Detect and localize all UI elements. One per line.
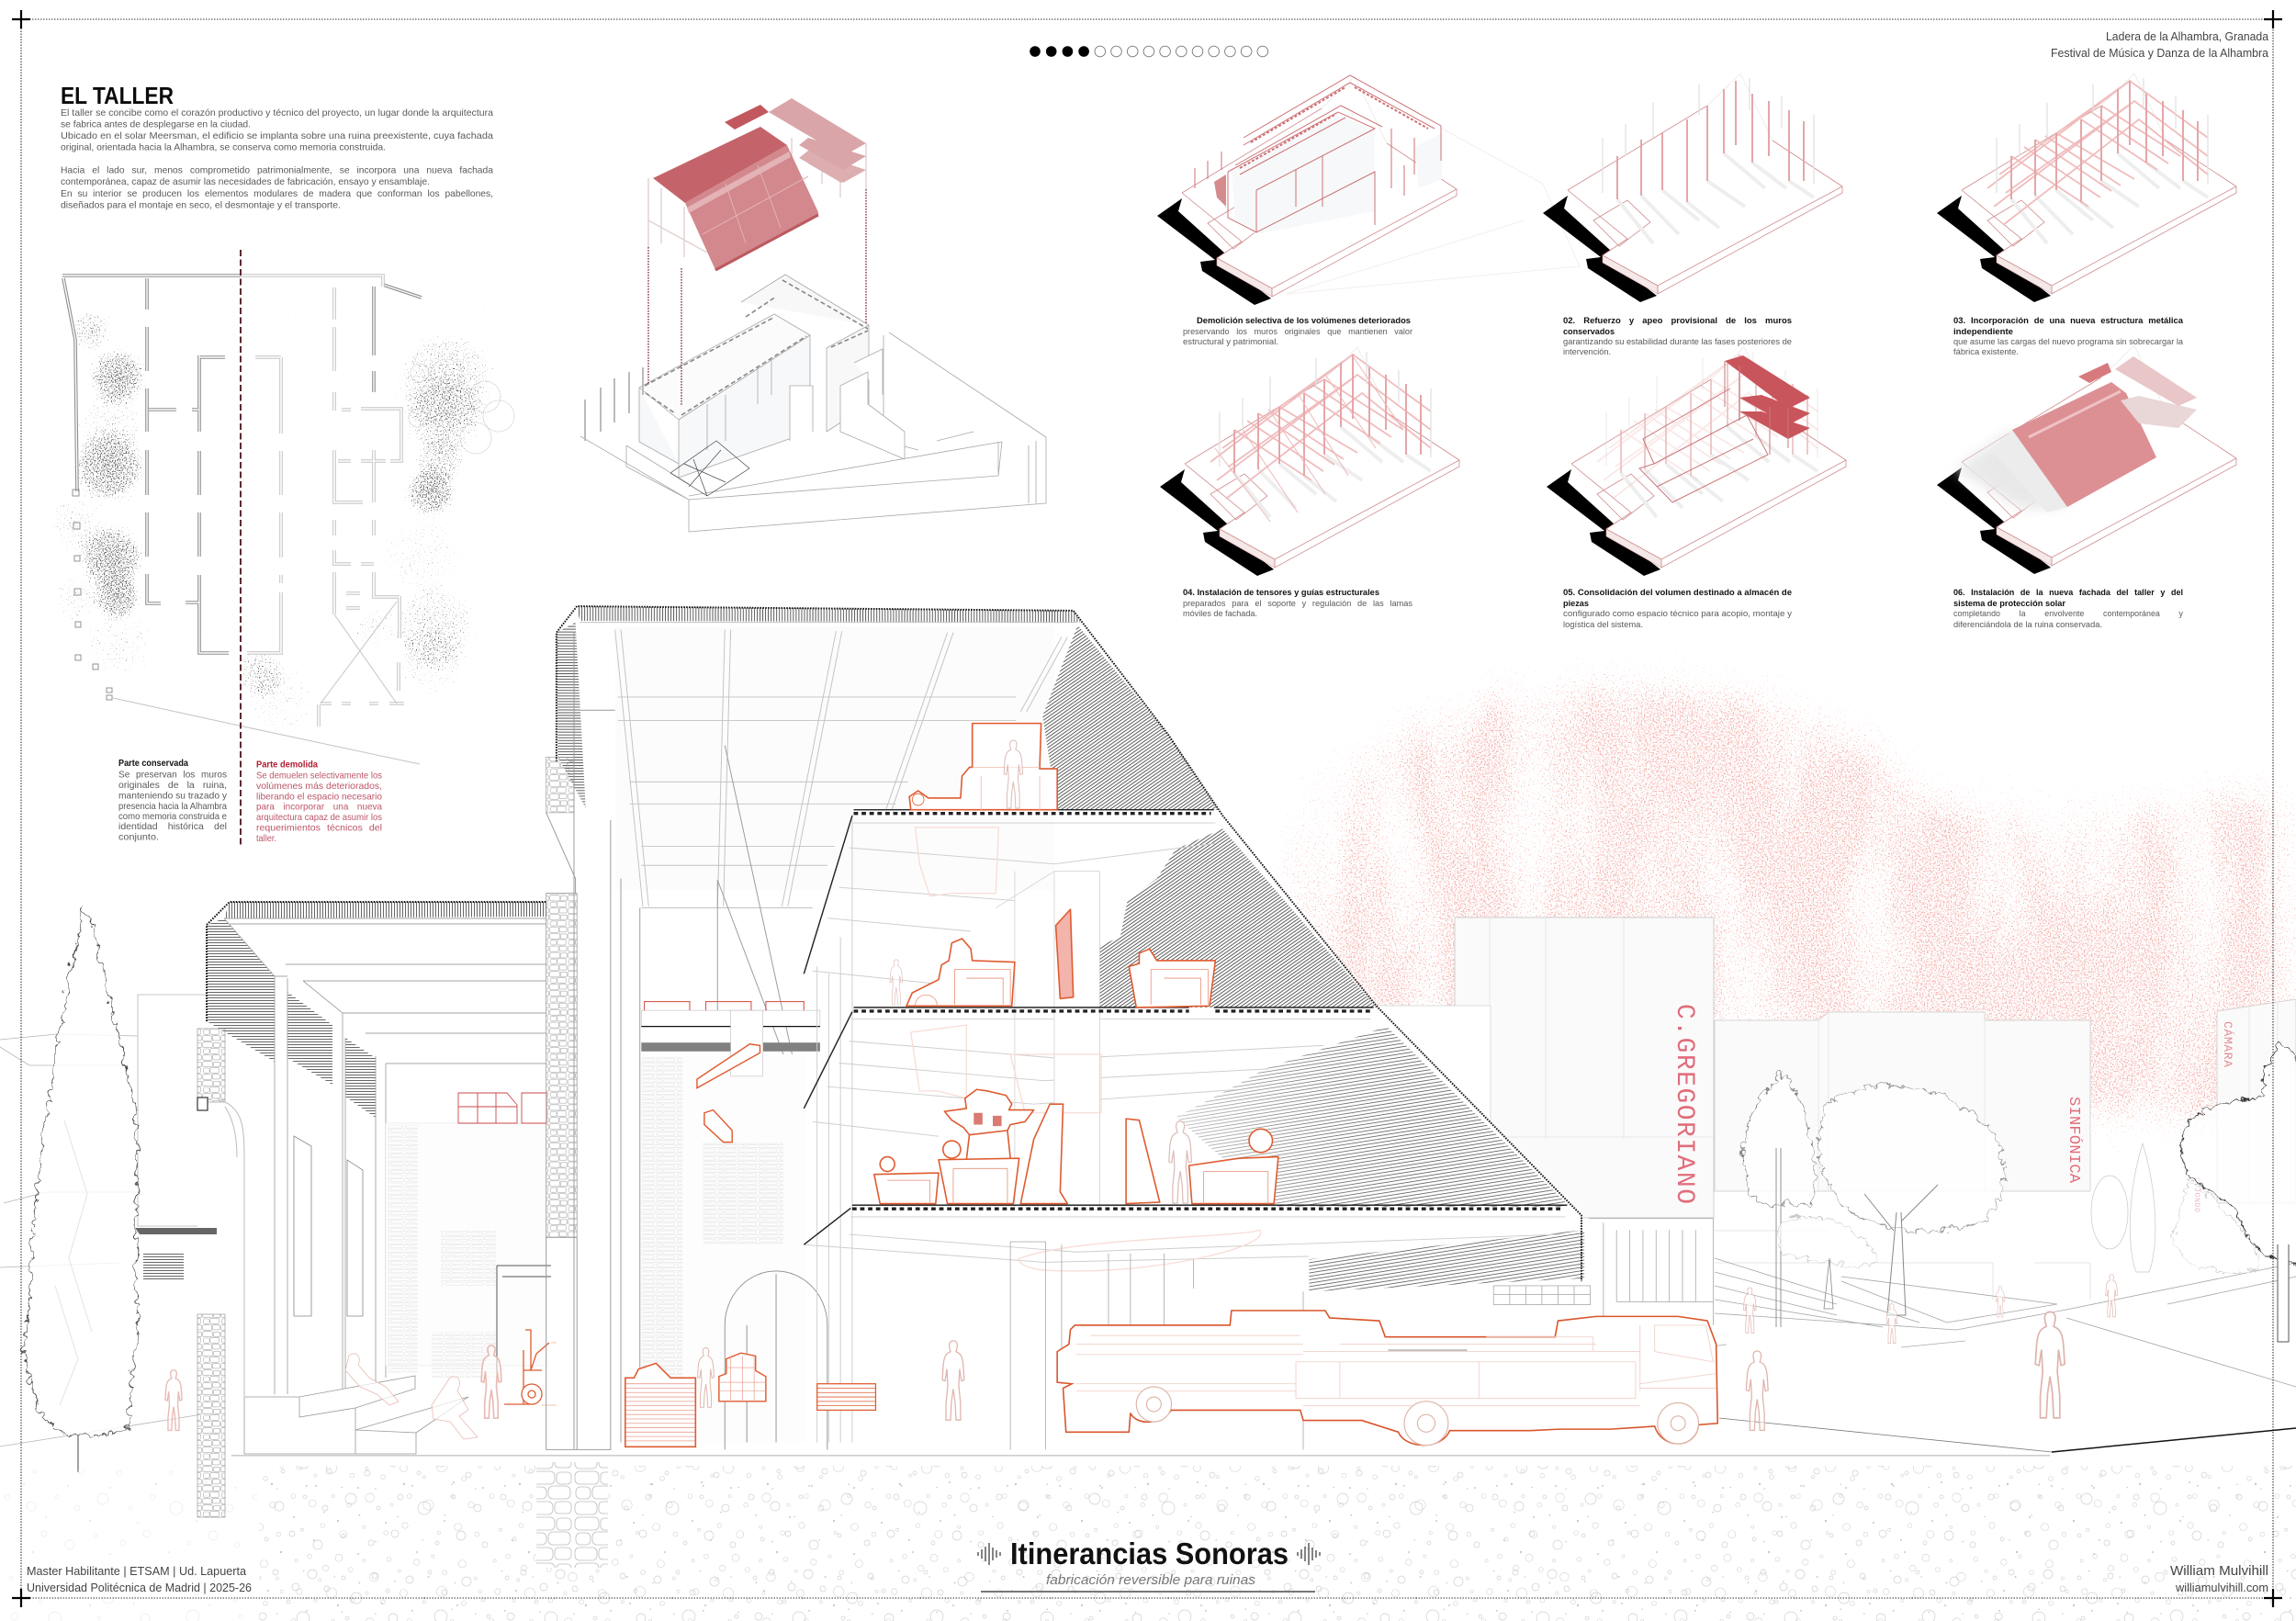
floor undersides: [804, 814, 1565, 1442]
step 06 finished facade: [1937, 345, 2236, 574]
bottom louver band: [1309, 1230, 1584, 1291]
panel joints: [703, 165, 808, 243]
facade bottom edge: [715, 215, 818, 270]
gravel ground: [0, 1466, 2296, 1621]
top roof strip: [577, 606, 1081, 623]
red workshop machines: [874, 724, 1278, 1204]
plan legend: conserved: identidad histórica del: [118, 822, 227, 832]
sound wave icon right: [1298, 1543, 1320, 1565]
side windows: [294, 1136, 363, 1316]
hall: Sinfónica: [1715, 1012, 2090, 1191]
project title: Itinerancias Sonoras: [1010, 1537, 1289, 1570]
label: C. Gregoriano: C.GREGORIANO: [1670, 1004, 1698, 1204]
progress dots: [1030, 46, 1268, 57]
underside band: [135, 1228, 217, 1234]
ceiling beams: [224, 918, 546, 1396]
intro text: se fabrica antes de desplegarse en la ciudad.: [61, 119, 251, 130]
grey ghost volume: [1955, 430, 2067, 509]
lower louvers: [143, 1253, 184, 1280]
demolished walls: [241, 276, 404, 726]
intro text: En su interior se producen los elementos modulares de madera que conforman los pabellones,: [61, 189, 493, 199]
arched opening: [217, 1098, 244, 1396]
caption 05: 05. Consolidación del volumen destinado a almacén de: [1563, 588, 1792, 597]
slab edges: [804, 816, 852, 1244]
main section drawing (workshop): [231, 606, 2118, 1456]
red material stacks: [625, 1353, 875, 1449]
plan legend: demolished: para incorporar una nueva: [256, 803, 382, 812]
caption 06: completando la envolvente contemporánea y: [1953, 609, 2184, 618]
step 01 demolition: [1157, 75, 1580, 305]
left cypress and neighbouring house: [0, 905, 217, 1472]
ruin base drawing: [580, 275, 1046, 532]
credits left: Universidad Politécnica de Madrid | 2025-26: [27, 1581, 252, 1594]
lower hatch fade: [1172, 1025, 1406, 1207]
small red cap: [2078, 363, 2111, 383]
caption 02: 02. Refuerzo y apeo provisional de los muros: [1563, 316, 1792, 325]
red facade: [685, 145, 818, 270]
tree: large centre: [1816, 1083, 2001, 1315]
left roof strip: [557, 623, 586, 808]
building mass: [557, 606, 1581, 1449]
author: William Mulvihill: [2170, 1563, 2268, 1579]
caption 03: 03. Incorporación de una nueva estructura metálica: [1953, 316, 2183, 325]
lower pink plates: [799, 151, 866, 183]
door frame: [497, 1266, 551, 1378]
red upper windows: [458, 1093, 546, 1123]
arch opening: [725, 1271, 827, 1449]
ceiling soft tone: [615, 626, 1054, 890]
step captions row two: [1183, 588, 2184, 629]
tree: small under: [1777, 1213, 1874, 1309]
caption 06: diferenciándola de la ruina conservada.: [1953, 620, 2102, 629]
caption 01: Demolición selectiva de los volúmenes deteriorados: [1197, 316, 1411, 325]
ground floor framing: [1010, 1219, 1713, 1449]
people: portico: [165, 1345, 501, 1430]
plan legend: conserved: como memoria construida e: [118, 812, 227, 822]
step 02 pillars: [1543, 73, 1842, 302]
tree stipple: [46, 308, 501, 737]
stone pier: [546, 757, 574, 813]
plaza podium: [1681, 1231, 2296, 1452]
neighbouring house: [0, 995, 217, 1447]
intro text: contemporánea, capaz de asumir las necesidades de fabricación, ensayo y ensamblaje.: [61, 177, 430, 187]
plan legend: conserved: [118, 759, 228, 843]
caption 03: que asume las cargas del nuevo programa sin sobrecargar la: [1953, 337, 2183, 346]
plan legend: demolished: Se demuelen selectivamente los: [256, 771, 382, 781]
caption 06: sistema de protección solar: [1953, 599, 2066, 608]
nave walls: [639, 335, 810, 478]
machine: small table: [874, 1157, 939, 1204]
exploded red volume: [648, 98, 866, 406]
machine: worktable left: [906, 939, 1015, 1006]
truck silhouette: [1057, 1311, 1717, 1445]
caption 05: logística del sistema.: [1563, 620, 1643, 629]
central column: [996, 872, 1099, 1210]
truck detail lines: [1076, 1325, 1716, 1406]
site section: left portico: [135, 902, 602, 1517]
people: outdoors: [698, 1275, 2118, 1430]
plan legend: demolished: volúmenes más deteriorados,: [256, 782, 382, 792]
truck wheels: [1136, 1387, 1699, 1446]
middle facade hatch: [1099, 828, 1377, 1007]
tree: dark right: [2178, 1038, 2296, 1342]
location text: [2051, 29, 2269, 60]
top pink plate: [769, 98, 866, 156]
dark red plates: [1725, 355, 1810, 439]
left dark louvers: [207, 902, 546, 1118]
caption 04: [1183, 588, 1413, 618]
plan legend: conserved: originales de la ruina,: [118, 781, 227, 791]
plan legend: conserved: Se preservan los muros: [118, 770, 227, 781]
ghost machinery reflections: [911, 827, 1261, 1271]
dotted guide lines: [648, 189, 866, 406]
caption 05: piezas: [1563, 599, 1589, 608]
construction sequence axonometrics: [1157, 73, 2236, 576]
tension cables: [717, 746, 804, 1109]
caption 06: [1953, 588, 2184, 629]
caption 06: 06. Instalación de la nueva fachada del taller y del: [1953, 588, 2183, 597]
step 03 metal structure: [1937, 73, 2236, 302]
author: [2170, 1563, 2268, 1594]
caption 01: estructural y patrimonial.: [1183, 337, 1278, 346]
tree canopies outlined: [409, 359, 514, 454]
credits left: [24, 1559, 258, 1594]
label: Sinfónica: SINFÓNICA: [2065, 1097, 2083, 1184]
caption 03: fábrica existente.: [1953, 347, 2019, 356]
cut line: [240, 250, 242, 847]
pink sound mist: [1286, 675, 2296, 1139]
small red roof: [725, 105, 769, 129]
dotted facade edge: [557, 606, 1581, 1281]
caption 02: garantizando su estabilidad durante las fases posteriores de: [1563, 337, 1792, 346]
caption 02: intervención.: [1563, 347, 1611, 356]
caption 05: [1563, 588, 1793, 629]
plan legend: demolished: requerimientos técnicos del: [256, 823, 382, 834]
intro text: Hacia el lado sur, menos comprometido patrimonialmente, se incorpora una nueva fachada: [61, 165, 493, 176]
location text: Ladera de la Alhambra, Granada: [2106, 29, 2269, 43]
caption 03: independiente: [1953, 327, 2013, 336]
conserved walls: [62, 276, 422, 653]
frame lines: [648, 119, 866, 257]
panel on hoist: [1056, 909, 1074, 998]
label: C. Jondo: C.JONDO: [2192, 1177, 2200, 1212]
workshop figures: [890, 740, 1191, 1203]
tree: tall left: [1740, 1070, 1815, 1327]
ground line: [231, 1455, 2050, 1457]
central nave: [639, 314, 810, 420]
location text: Festival de Música y Danza de la Alhambra: [2051, 46, 2269, 60]
plan legend: demolished: taller.: [256, 834, 276, 844]
caption 01: [1183, 316, 1412, 346]
hatched roof louvers: [557, 606, 1584, 1291]
intro text: El taller se concibe como el corazón productivo y técnico del proyecto, un lugar donde la arquitectura: [61, 108, 493, 118]
plan legend: demolished: arquitectura capaz de asumir los: [256, 813, 382, 823]
stepped seating: [244, 1376, 468, 1454]
cypress tree: [20, 905, 136, 1472]
concrete column lines: [546, 633, 640, 1449]
facade strip: [2029, 391, 2121, 437]
subtitle rule: [981, 1591, 1315, 1593]
red roof: [653, 127, 787, 203]
plan legend: demolished: [256, 760, 382, 844]
plan legend: conserved: manteniendo su trazado y: [118, 792, 228, 801]
caption 02: conservados: [1563, 327, 1615, 336]
caption 04: móviles de fachada.: [1183, 609, 1257, 618]
hall: Cámara: [2217, 999, 2296, 1203]
intro text: Ubicado en el solar Meersman, el edificio se implanta sobre una ruina preexistente, cuya fachada: [61, 131, 493, 141]
hall: C. Gregoriano: [1377, 917, 1714, 1218]
intro text: [61, 108, 493, 211]
credits left: Master Habilitante | ETSAM | Ud. Lapuerta: [27, 1564, 247, 1578]
caption 04: preparados para el soporte y regulación de las lamas: [1183, 599, 1413, 608]
top beam and rafters: [580, 623, 1076, 908]
buried stone footing: [536, 1462, 608, 1568]
stack: gridded blocks: [719, 1353, 766, 1401]
caption 04: 04. Instalación de tensores y guías estructurales: [1183, 588, 1379, 597]
stack: flat pallet: [817, 1384, 875, 1410]
site walls: [580, 275, 1046, 532]
plan legend: demolished: Parte demolida: [256, 760, 318, 770]
stone pier left: [197, 1029, 225, 1517]
stack: horizontal boards: [625, 1363, 695, 1449]
author: williamulvihill.com: [2175, 1581, 2268, 1594]
caption 05: configurado como espacio técnico para acopio, montaje y: [1563, 609, 1793, 618]
lower facade hatch: [1176, 1027, 1570, 1207]
step captions row one: [1183, 316, 2183, 356]
plan legend: conserved: Parte conservada: [118, 759, 188, 769]
exposed wall with brick: [641, 1054, 805, 1442]
portico walls: [197, 902, 546, 1460]
caption 01: preservando los muros originales que mantienen valor: [1183, 327, 1412, 336]
sound wave icon left: [978, 1543, 1000, 1565]
subtitle: fabricación reversible para ruinas: [1046, 1572, 1256, 1588]
plan legend: demolished: liberando el espacio necesario: [256, 792, 382, 803]
intro text: diseñados para el montaje en seco, el desmontaje y el transporte.: [61, 200, 341, 211]
ruin arches and walls: [707, 349, 905, 459]
caption 03: [1953, 316, 2183, 356]
seated people: [345, 1354, 478, 1439]
step 04 tensors: [1160, 347, 1459, 576]
upper facade hatch: [1042, 625, 1219, 810]
exploded axonometric: [580, 98, 1046, 532]
pink facade: [2012, 382, 2156, 507]
distant trees: [2091, 1143, 2256, 1272]
machine: worktable right: [1129, 949, 1215, 1007]
caption 02: [1563, 316, 1792, 356]
hanging timbers: [697, 1044, 760, 1143]
skylight: [670, 441, 749, 496]
site plan: [46, 250, 514, 847]
red crates on beam: [645, 1002, 804, 1010]
crane beam band: [641, 1010, 820, 1076]
title: EL TALLER: [61, 82, 174, 109]
posts: [585, 367, 643, 441]
truck: [1057, 1311, 1717, 1446]
clerestory windows: [645, 280, 868, 415]
corrugated floor slabs: [852, 810, 1567, 1209]
light band on facade: [687, 152, 791, 213]
pier and structural columns: [546, 633, 640, 1449]
plan legend: conserved: presencia hacia la Alhambra: [118, 802, 227, 812]
columns left: [73, 490, 112, 700]
demolition cross lines: [113, 602, 420, 764]
step 05 storage volume: [1547, 347, 1846, 576]
plan legend: conserved: conjunto.: [118, 832, 159, 843]
machine: table right: [1189, 1129, 1278, 1204]
project title block: [978, 1537, 1320, 1593]
machine: crate upper floor: [909, 724, 1057, 810]
pink window grid: [808, 138, 841, 183]
rear wall: [741, 275, 869, 432]
machine: press: [939, 1089, 1034, 1204]
wedge panels: [1020, 1104, 1160, 1204]
pale plates: [2121, 396, 2197, 428]
label: Cámara: CÁMARA: [2221, 1021, 2234, 1067]
red forklift: [504, 1330, 602, 1405]
intro text: original, orientada hacia la Alhambra, se conserva como memoria construida.: [61, 143, 386, 152]
back wall with brick: [386, 1123, 546, 1378]
background concert halls: [1377, 917, 2296, 1218]
plaza and trees right: [1681, 1038, 2296, 1452]
